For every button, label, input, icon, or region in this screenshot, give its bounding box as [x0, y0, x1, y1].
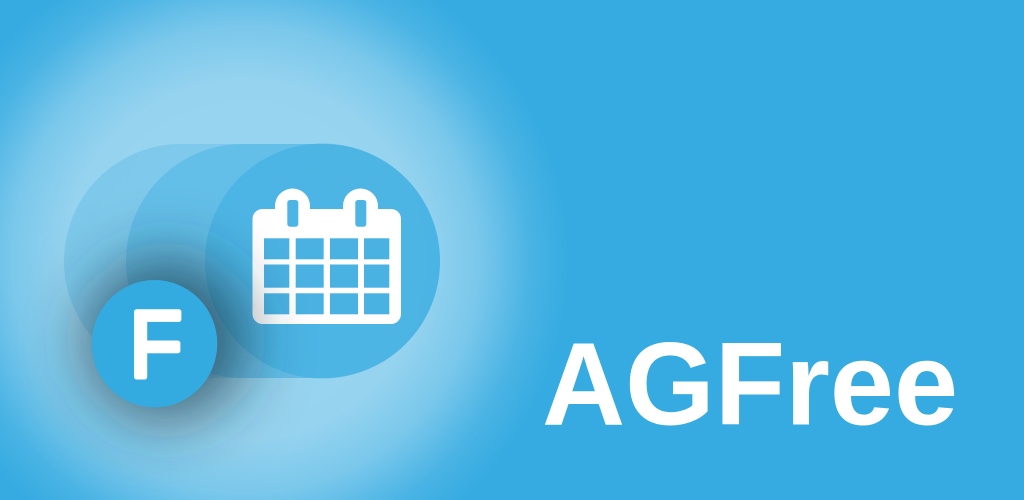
middle pill layer — [126, 144, 440, 378]
front circle — [205, 144, 440, 378]
drop shadow of F badge — [86, 260, 246, 420]
badge letter F: F — [130, 292, 182, 397]
title: AGFree — [542, 318, 958, 450]
icon: calendar — [252, 189, 401, 324]
rear pill layer — [64, 144, 440, 378]
badge: F circle — [92, 280, 217, 407]
